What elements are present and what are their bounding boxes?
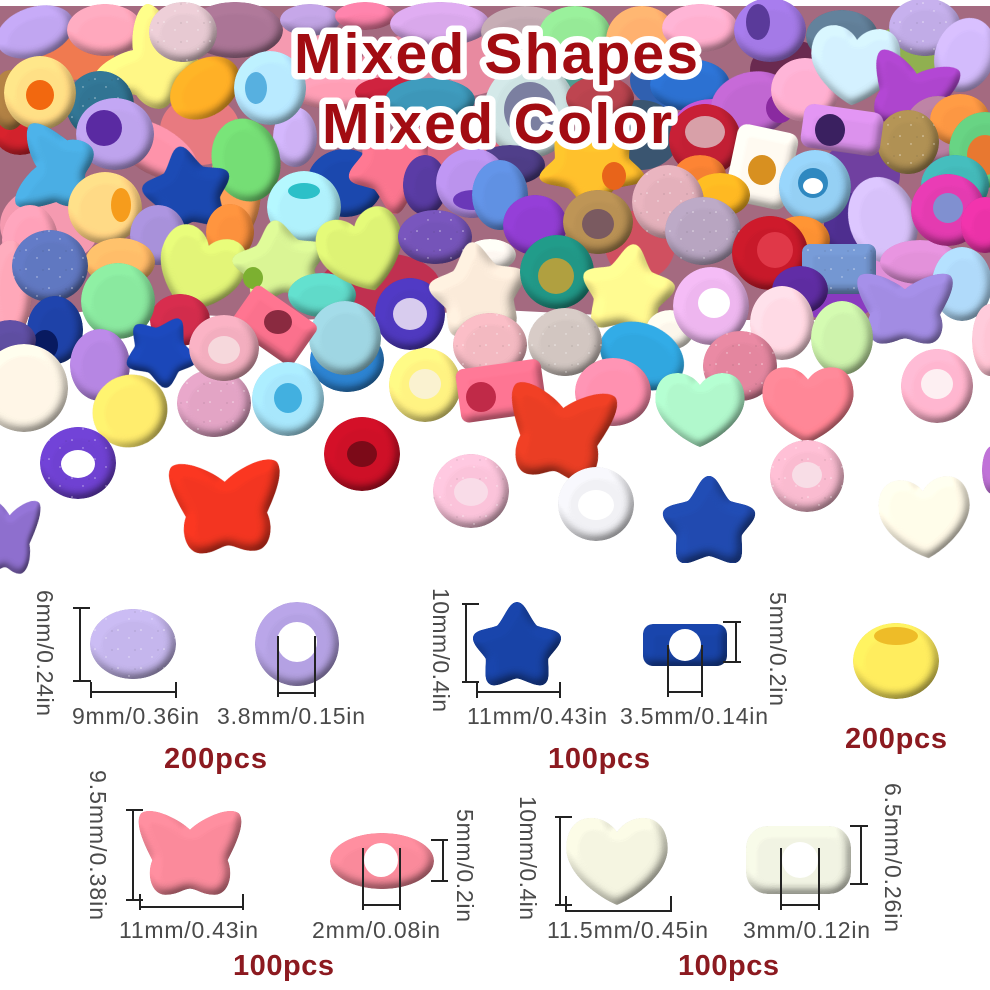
bead: blue star bbox=[667, 480, 751, 559]
bead photo: pink butterfly bbox=[139, 811, 241, 895]
label: 6mm height: 6mm/0.24in bbox=[32, 590, 58, 716]
product: heart bead bbox=[515, 783, 906, 982]
bead photo: blue star bbox=[477, 606, 557, 681]
label: 10mm height: 10mm/0.4in bbox=[428, 588, 454, 712]
bead: dark red pony bbox=[324, 417, 400, 491]
bead photo: pink butterfly side bbox=[330, 833, 434, 889]
label: 3.5mm hole: 3.5mm/0.14in bbox=[620, 703, 768, 729]
dimension lines bbox=[555, 817, 868, 912]
label: 9.5mm height: 9.5mm/0.38in bbox=[85, 770, 111, 920]
label: 11.5mm width: 11.5mm/0.45in bbox=[547, 917, 708, 943]
bead: red butterfly bbox=[168, 459, 284, 555]
beads: front row at pile edge bbox=[0, 267, 973, 485]
label: 5mm thickness: 5mm/0.2in bbox=[452, 809, 478, 922]
label: 6.5mm thickness: 6.5mm/0.26in bbox=[880, 783, 906, 932]
beads: upper cluster bbox=[2, 23, 990, 321]
bead: purple butterfly at left edge bbox=[0, 496, 41, 575]
bead pile photo bbox=[0, 0, 990, 575]
product: yellow pony bead bbox=[845, 623, 947, 755]
product: star bead bbox=[428, 588, 791, 775]
bead photo: blue star side bbox=[643, 624, 727, 666]
label: 3mm hole: 3mm/0.12in bbox=[743, 917, 870, 943]
dimension lines bbox=[126, 810, 448, 910]
bead photo: cream heart side bbox=[746, 826, 851, 894]
bead photo: lilac pony front bbox=[255, 602, 339, 686]
label: 5mm thickness: 5mm/0.2in bbox=[765, 592, 791, 706]
bead photo: lilac pony side bbox=[90, 609, 176, 679]
product: round pony bead bbox=[32, 590, 365, 775]
bead: lilac partial at right edge bbox=[982, 446, 990, 494]
dimension lines bbox=[73, 608, 315, 698]
beads: back row along top edge bbox=[0, 0, 990, 240]
bead: clear glitter pony bbox=[558, 467, 634, 541]
bead: purple glitter pony bbox=[40, 427, 116, 499]
bead photo: cream heart bbox=[566, 818, 668, 905]
title: Mixed Color bbox=[322, 92, 672, 156]
dimension lines bbox=[462, 604, 741, 698]
bead: pink glitter pony right bbox=[770, 440, 844, 512]
bead: white heart bbox=[876, 474, 974, 562]
product: butterfly bead bbox=[85, 770, 478, 982]
beads: filler colours behind pile bbox=[0, 20, 940, 320]
label: 10mm height: 10mm/0.4in bbox=[515, 796, 541, 920]
quantity: 200pcs: 200pcs bbox=[845, 723, 947, 755]
beads: middle band with hearts and stars bbox=[0, 201, 990, 401]
title: Mixed Shapes bbox=[294, 22, 698, 86]
label: 11mm width: 11mm/0.43in bbox=[119, 917, 258, 943]
bead: pink glitter pony bbox=[433, 454, 509, 528]
label: 2mm hole: 2mm/0.08in bbox=[312, 917, 440, 943]
title bbox=[294, 22, 698, 156]
label: 3.8mm hole: 3.8mm/0.15in bbox=[217, 703, 365, 729]
label: 9mm width: 9mm/0.36in bbox=[72, 703, 199, 729]
quantity: 100pcs: 100pcs bbox=[678, 950, 779, 982]
bead photo: yellow pony bbox=[853, 623, 939, 699]
label: 11mm width: 11mm/0.43in bbox=[467, 703, 607, 729]
quantity: 100pcs: 100pcs bbox=[548, 743, 650, 775]
quantity: 200pcs: 200pcs bbox=[164, 743, 267, 775]
quantity: 100pcs: 100pcs bbox=[233, 950, 334, 982]
